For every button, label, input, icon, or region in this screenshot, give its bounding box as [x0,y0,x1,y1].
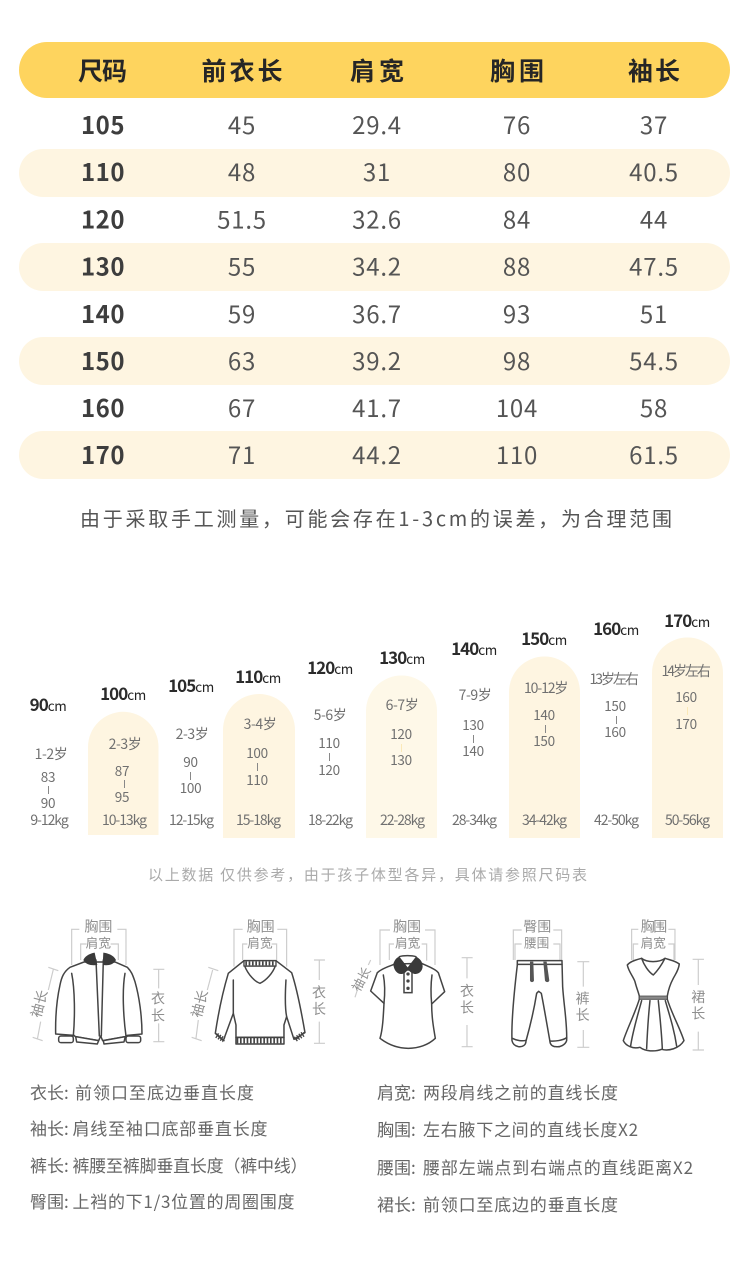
column 105cm: 2-3岁 [176,724,208,744]
column 170cm: 14岁左右 [662,661,711,681]
column 90cm: 90cm [30,691,66,716]
column 90cm: 1-2岁 [35,744,67,764]
measurement definitions: left column: 衣长: [30,1079,69,1104]
row 140: 93 [503,295,531,330]
row 110: 31 [363,153,391,188]
table header bar: 尺码 [78,52,127,88]
column 100cm: 95 [115,786,129,806]
icon: polo shirt measurement: 肩宽 [395,932,421,951]
icon: trousers measurement [512,917,590,1047]
column 120cm: 110 [318,732,340,752]
icon: trousers measurement: 腰围 [524,932,549,951]
row 170: 170 [81,436,125,471]
row 140: 36.7 [352,295,402,330]
row 130: 130 [81,248,125,282]
measurement definitions: right column [377,1079,693,1216]
column 140cm: 7-9岁 [459,685,491,705]
row 160: 104 [496,389,538,424]
row 140: 140 [81,295,125,330]
column 90cm [30,691,69,830]
row 170: 44.2 [352,436,402,471]
row 120: 51.5 [217,200,267,236]
column 105cm [168,672,214,830]
column 105cm: 105cm [168,672,214,697]
table header bar: 前衣长 [202,52,282,88]
column 120cm: 5-6岁 [314,705,346,725]
column 150cm: 150cm [521,625,567,650]
icon: jacket measurement: 胸围 [84,917,112,937]
measurement definitions: right column: 裙长: [377,1191,416,1216]
column 100cm: 2-3岁 [109,734,141,754]
measurement definitions: left column: 上裆的下1/3位置的周圈围度 [72,1188,294,1213]
icon: dress measurement: 长 [691,1003,705,1023]
column 170cm: 160 [675,686,697,706]
column 105cm: 100 [180,777,201,797]
measurement definitions: left column: 裤长: [30,1152,69,1177]
icon: sweater measurement: 胸围 [247,917,275,937]
icon: dress measurement: 胸围 [641,917,667,937]
row 160 [81,389,668,424]
measurement definitions: left column: 裤腰至裤脚垂直长度（裤中线） [72,1152,308,1177]
row 130: 34.2 [352,248,402,282]
row 105 [81,106,668,141]
column 150cm: 10-12岁 [524,678,568,698]
column 90cm: 9-12kg [30,810,69,830]
icon: sweater measurement: 肩宽 [247,932,273,951]
icon: trousers measurement: 长 [576,1005,590,1025]
column 90cm: 83 [41,766,55,786]
column 90cm: 90 [41,792,55,812]
column 150cm: 34-42kg [522,810,567,830]
row 130: 47.5 [629,248,679,282]
row 105: 105 [81,106,125,141]
row 110: 40.5 [629,153,679,188]
column 130cm: 22-28kg [380,810,425,830]
row 150 [19,337,730,385]
row 160: 67 [228,389,256,424]
column 100cm: 87 [115,760,129,780]
row 150: 98 [503,342,531,377]
row 140: 59 [228,295,256,330]
column 100cm: 10-13kg [102,810,147,830]
row 120: 32.6 [352,200,402,236]
table header bar [19,42,730,98]
icon: polo shirt measurement: 长 [460,998,474,1018]
measurement definitions: right column: 腰围: [377,1154,416,1179]
column 120cm: 120 [318,759,340,779]
column 170cm: 50-56kg [665,810,710,830]
icon: sweater measurement [186,917,326,1044]
column 140cm [451,635,497,830]
height reference chart [30,607,723,838]
size table [19,42,730,479]
row 170: 110 [496,436,538,471]
row 140 [81,295,668,330]
row 105: 37 [640,106,668,141]
row 110 [19,149,730,197]
column 110cm: 110 [246,769,268,789]
measurement definitions: right column: 前领口至底边的垂直长度 [423,1191,618,1216]
row 105: 45 [228,106,256,141]
column 140cm: 130 [462,714,484,734]
icon: sweater measurement: 袖长 [186,988,213,1020]
column 110cm: 110cm [235,663,281,688]
row 120 [81,200,668,236]
chart disclaimer: 以上数据 仅供参考，由于孩子体型各异，具体请参照尺码表 [148,864,587,885]
icon: dress measurement: 肩宽 [641,932,666,951]
row 130 [19,243,730,291]
column 110cm: 100 [246,742,268,762]
row 150: 39.2 [352,342,402,377]
measurement definitions: left column: 臀围: [30,1188,69,1213]
column 140cm: 140cm [451,635,497,660]
table header bar: 肩宽 [350,52,404,88]
icon: jacket measurement [26,917,165,1044]
icon: trousers measurement: 臀围 [523,917,551,937]
column 110cm: 15-18kg [236,810,281,830]
row 110: 110 [81,153,125,188]
column 160cm: 13岁左右 [590,669,639,689]
column 170cm: 170 [675,713,697,733]
column 160cm: 160 [604,721,626,741]
measurement error note: 由于采取手工测量，可能会存在1-3cm的误差，为合理范围 [80,503,672,532]
measurement definitions: right column: 胸围: [377,1116,416,1141]
icon: dress measurement [623,917,705,1051]
icon: polo shirt measurement: 衣 [460,981,474,1001]
column 150cm: 140 [533,704,555,724]
measurement definitions: right column: 两段肩线之前的直线长度 [423,1079,618,1104]
icon: jacket measurement: 肩宽 [86,932,111,951]
column 150cm [509,625,580,838]
measurement definitions: right column: 腰部左端点到右端点的直线距离X2 [423,1154,693,1179]
column 130cm [366,644,437,838]
row 130: 55 [228,248,256,282]
column 100cm: 100cm [100,680,146,705]
icon: jacket measurement: 衣 [151,988,165,1008]
column 120cm [307,654,353,830]
row 120: 44 [640,200,668,236]
column 160cm: 160cm [593,615,639,640]
row 110: 48 [228,153,256,188]
column 160cm: 150 [604,695,626,715]
column 100cm [88,680,158,835]
column 105cm: 12-15kg [169,810,214,830]
measurement definitions: left column [30,1079,308,1213]
row 150: 63 [228,342,256,377]
icon: sweater measurement: 长 [312,999,326,1019]
icon: jacket measurement: 长 [151,1006,165,1026]
row 110: 80 [503,153,531,188]
row 160: 160 [81,389,125,424]
column 170cm: 170cm [664,607,710,632]
icon: polo shirt measurement [346,917,474,1048]
row 170: 71 [228,436,256,471]
column 170cm [652,607,723,838]
column 120cm: 18-22kg [308,810,353,830]
row 140: 51 [640,295,668,330]
icon: sweater measurement: 衣 [312,982,326,1002]
icon: polo shirt measurement: 袖长 [346,963,375,994]
row 105: 76 [503,106,531,141]
table header bar: 胸围 [490,52,544,88]
row 170: 61.5 [629,436,679,471]
measurement definitions: right column: 左右腋下之间的直线长度X2 [423,1116,638,1141]
measurement definitions: right column: 肩宽: [377,1079,416,1104]
column 130cm: 6-7岁 [386,695,418,715]
column 105cm: 90 [183,751,198,771]
row 160: 41.7 [352,389,402,424]
icon: trousers measurement: 裤 [576,988,590,1008]
column 130cm: 130 [390,749,412,769]
column 140cm: 140 [462,740,484,760]
column 140cm: 28-34kg [452,810,497,830]
row 160: 58 [640,389,668,424]
measurement definitions: left column: 肩线至袖口底部垂直长度 [72,1115,268,1140]
icon: dress measurement: 裙 [691,987,705,1007]
measurement definitions: left column: 袖长: [30,1115,69,1140]
table header bar: 袖长 [628,52,680,88]
row 150: 54.5 [629,342,679,377]
column 110cm: 3-4岁 [244,714,276,734]
column 120cm: 120cm [307,654,353,679]
row 120: 84 [503,200,531,236]
icon: jacket measurement: 袖长 [26,988,52,1020]
column 160cm [590,615,639,830]
column 150cm: 150 [533,730,555,750]
row 120: 120 [81,200,125,236]
column 130cm: 120 [390,723,412,743]
row 130: 88 [503,248,531,282]
column 160cm: 42-50kg [594,810,639,830]
row 170 [19,431,730,479]
measurement definitions: left column: 前领口至底边垂直长度 [75,1079,254,1104]
row 105: 29.4 [352,106,402,141]
column 110cm [223,663,295,838]
row 150: 150 [81,342,125,377]
column 130cm: 130cm [379,644,425,669]
icon: polo shirt measurement: 胸围 [393,917,421,937]
